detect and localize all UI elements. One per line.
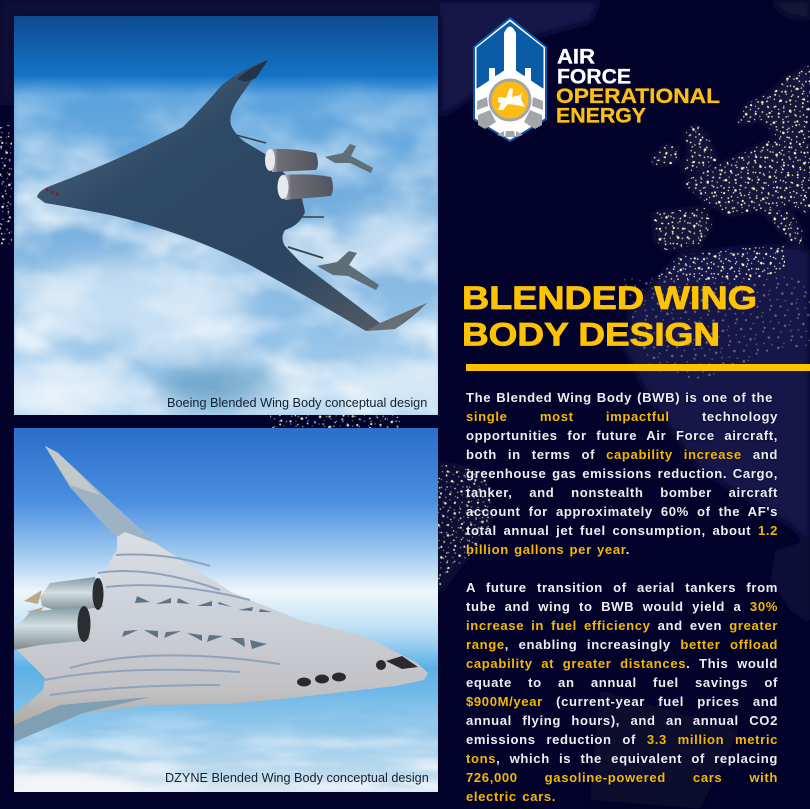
text block: paragraphs on the Blended Wing Body: greenhouse gas emissions reduction. Cargo, [466,466,778,481]
title [462,280,757,352]
text block: paragraphs on the Blended Wing Body: range, enabling increasingly better offload [466,637,778,652]
text block: paragraphs on the Blended Wing Body: both in terms of capability increase and [466,447,778,462]
title: BLENDED WING [462,280,757,316]
photo: Boeing blended wing body [0,16,445,420]
text block: paragraphs on the Blended Wing Body: capability at greater distances. This would [466,656,778,671]
aircraft: DZYNE BWB airframe [14,446,428,742]
aircraft: DZYNE BWB engines [14,577,104,650]
text block: paragraphs on the Blended Wing Body: electric cars. [466,789,556,804]
caption: DZYNE photo: DZYNE Blended Wing Body conceptual design [165,771,429,785]
text block: paragraphs on the Blended Wing Body: tons, which is the equivalent of replacing [466,751,778,766]
photo: DZYNE blended wing body [0,428,438,806]
icon: yellow roundel with jet [490,80,530,120]
text block: paragraphs on the Blended Wing Body: A future transition of aerial tankers from [466,580,778,595]
logo wordmark: ENERGY [556,104,646,128]
aircraft: escort drones and missiles [236,135,379,290]
clouds: upper photo [0,76,445,420]
text block: paragraphs on the Blended Wing Body: account for approximately 60% of the AF's [466,504,778,519]
text block: paragraphs on the Blended Wing Body: emissions reduction of 3.3 million metric [466,732,778,747]
text block: paragraphs on the Blended Wing Body [465,390,778,804]
aircraft: DZYNE BWB cockpit and doors [297,656,418,686]
icon: gray hex panels [477,97,543,137]
logo wordmark: OPERATIONAL [556,85,720,108]
text block: paragraphs on the Blended Wing Body: 726,000 gasoline-powered cars with [466,770,778,785]
text block: paragraphs on the Blended Wing Body: billion gallons per year. [466,542,630,557]
aircraft: Boeing BWB engines [265,149,333,200]
icon: white aircraft in badge [476,26,544,96]
text block: paragraphs on the Blended Wing Body: annual flying hours), and an annual CO2 [466,713,778,728]
text block: paragraphs on the Blended Wing Body: total annual jet fuel consumption, about 1.2 [466,523,778,538]
logo wordmark [556,46,720,128]
logo wordmark: AIR [557,46,595,68]
aircraft: Boeing BWB airframe [37,60,427,331]
caption: Boeing photo: Boeing Blended Wing Body conceptual design [167,396,427,410]
clouds: lower photo [14,712,438,792]
aircraft: DZYNE BWB window markings [122,596,272,649]
text block: paragraphs on the Blended Wing Body: tube and wing to BWB would yield a 30% [466,599,778,614]
title rule [466,364,810,371]
text block: paragraphs on the Blended Wing Body: single most impactful technology [466,409,778,424]
text block: paragraphs on the Blended Wing Body: increase in fuel efficiency and even greater [466,618,778,633]
text block: paragraphs on the Blended Wing Body: $900M/year (current-year fuel prices and [466,694,778,709]
text block: paragraphs on the Blended Wing Body: equate to an annual fuel savings of [466,675,778,690]
text block: paragraphs on the Blended Wing Body: tanker, and nonstealth bomber aircraft [466,485,778,500]
text block: paragraphs on the Blended Wing Body: The Blended Wing Body (BWB) is one of the [466,390,773,405]
logo wordmark: FORCE [557,66,631,88]
title: BODY DESIGN [462,316,720,352]
text block: paragraphs on the Blended Wing Body: opportunities for future Air Force aircraft, [466,428,778,443]
